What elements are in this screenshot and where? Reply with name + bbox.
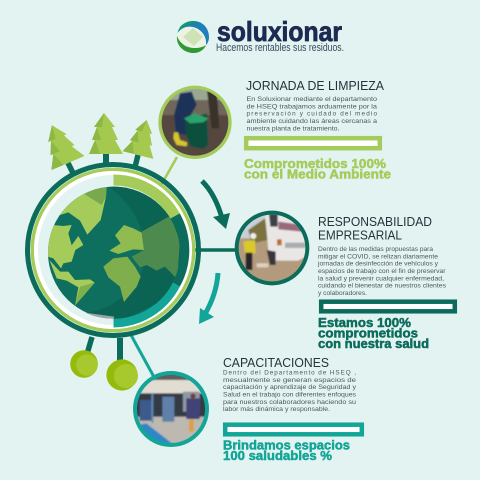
- land: asia: [132, 216, 180, 279]
- ring segments: [114, 180, 184, 322]
- section: jornada de limpieza: [244, 79, 391, 182]
- body text: ambiente cuidando las áreas cercanas a: [246, 118, 378, 125]
- body text: capacitación y aprendizaje de Seguridad y: [223, 384, 357, 391]
- body text: jornadas de desinfección de vehículos y: [317, 261, 439, 268]
- progress bar: [246, 138, 380, 148]
- callout: comprometidos: [318, 326, 418, 340]
- body text: mitigar el COVID, se relizan diariamente: [318, 253, 439, 260]
- body text: labor más dinámica y responsable.: [223, 406, 330, 413]
- body text: [246, 96, 378, 132]
- land: europe: [109, 225, 144, 254]
- ball left: [70, 350, 98, 378]
- body text: Dentro de las medidas propuestas para: [318, 246, 434, 253]
- connector: photo 3 to globe: [131, 335, 154, 377]
- logo: [177, 16, 344, 54]
- stick left: [87, 337, 92, 354]
- land: south america: [49, 260, 95, 305]
- globe: [48, 183, 187, 323]
- stick right: [117, 338, 123, 362]
- callout: Comprometidos 100%: [244, 156, 386, 171]
- heading: JORNADA DE LIMPIEZA: [246, 79, 385, 93]
- lime balls: [70, 337, 138, 391]
- outer rings: [28, 164, 198, 336]
- land: north america: [48, 225, 83, 268]
- photo: worker with bin: [158, 85, 235, 160]
- land: arctic: [60, 187, 106, 234]
- body text: espacios de trabajo con el fin de preservar: [318, 268, 446, 275]
- arrow: teal: [199, 273, 218, 324]
- tree right: [123, 116, 162, 167]
- tree left: [35, 118, 85, 175]
- callout: [318, 315, 429, 351]
- body text: Dentro del Departamento de HSEQ ,: [223, 370, 356, 376]
- photo: training: [133, 370, 211, 448]
- body text: [223, 370, 357, 413]
- callout: 100 saludables %: [223, 448, 332, 463]
- logo tagline: Hacemos rentables sus residuos.: [216, 42, 344, 54]
- body text: de HSEQ trabajamos arduamente por la: [246, 103, 378, 110]
- heading: CAPACITACIONES: [223, 356, 329, 370]
- body text: la salud y prevenir cualquier enfermedad,: [318, 275, 444, 282]
- body text: En Soluxionar mediante el departamento: [246, 96, 378, 103]
- callout: [223, 438, 350, 463]
- icon: logo globe: [177, 21, 209, 53]
- heading: [318, 215, 432, 242]
- body text: y colaboradores.: [318, 290, 367, 297]
- trees: [35, 113, 162, 175]
- section: capacitaciones: [223, 356, 362, 463]
- tree middle: [89, 113, 123, 166]
- ball right: [106, 359, 138, 391]
- body text: mesualmente se generan espacios de: [223, 377, 357, 384]
- globe shading: [86, 186, 180, 319]
- section: responsabilidad empresarial: [317, 215, 455, 351]
- globe badge: [28, 164, 198, 336]
- land: africa: [103, 257, 141, 302]
- callout: [244, 156, 391, 182]
- body text: nuestra planta de tratamiento.: [246, 125, 340, 132]
- body text: Salud en el trabajo con diferentes enfoques: [223, 392, 356, 398]
- body text: preservación y cuidado del medio: [246, 111, 377, 118]
- callout: con nuestra salud: [318, 336, 429, 351]
- logo wordmark: soluxionar: [217, 16, 342, 47]
- arrow: dark green: [202, 181, 230, 229]
- connector: photo 2 to globe: [188, 248, 240, 252]
- body text: [317, 246, 446, 297]
- heading: RESPONSABILIDAD: [318, 215, 432, 229]
- body text: para nuestros colaboradores haciendo su: [223, 399, 357, 406]
- callout: Brindamos espacios: [223, 438, 350, 452]
- heading: EMPRESARIAL: [318, 228, 402, 242]
- body text: cuidando el bienestar de nuestros clientes: [318, 283, 446, 290]
- connector: photo 1 to globe: [160, 157, 177, 187]
- progress bar: [321, 302, 455, 311]
- progress bar: [225, 425, 362, 434]
- callout: con el Medio Ambiente: [244, 166, 391, 182]
- callout: Estamos 100%: [318, 315, 411, 330]
- photo: truck disinfection: [235, 210, 310, 285]
